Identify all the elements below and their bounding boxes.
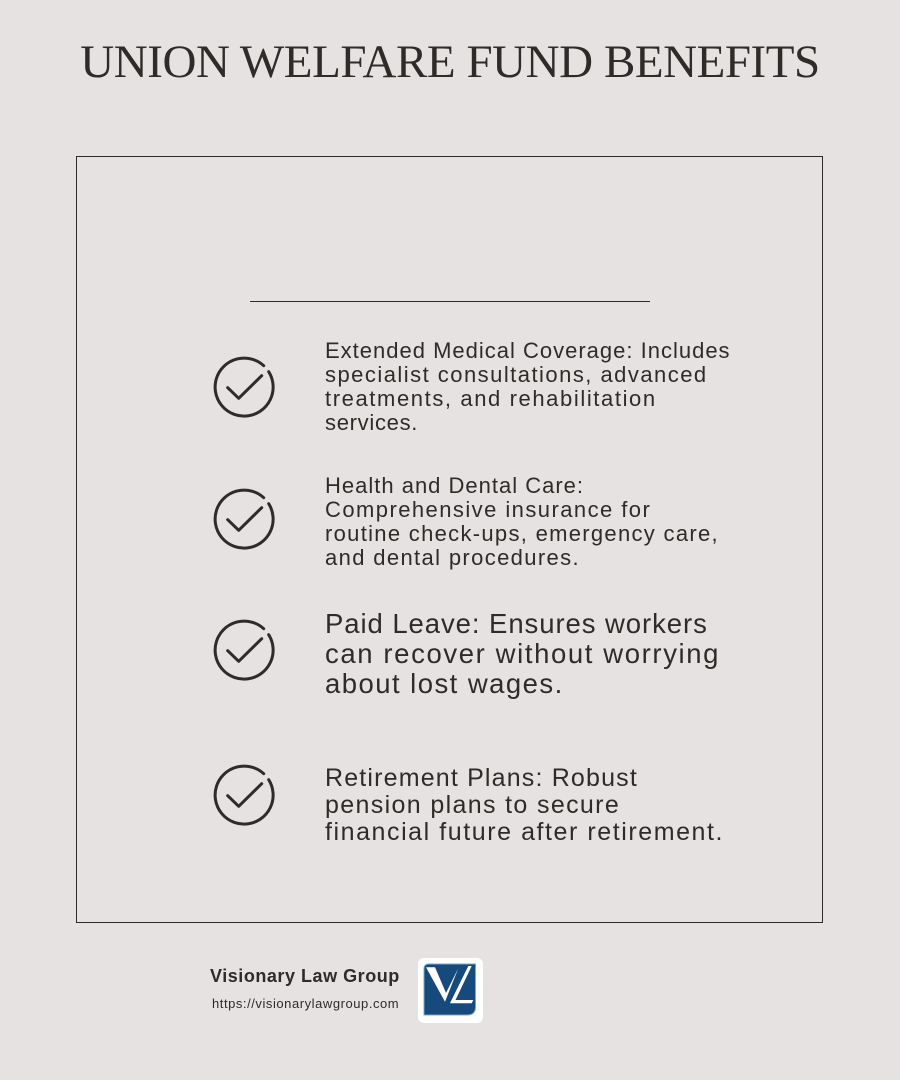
text: health and dental care: and dental procedures. [325,545,580,570]
footer brand name: Visionary Law Group [210,966,400,986]
text: retirement plans [325,764,724,846]
text: retirement plans: Retirement Plans: Robust [325,764,638,792]
text: retirement plans: pension plans to secure [325,791,620,819]
text: extended medical coverage: Extended Medical Coverage: Includes [325,338,731,363]
text: extended medical coverage: specialist consultations, advanced [325,362,708,387]
text: paid leave: about lost wages. [325,668,564,699]
text: health and dental care: Comprehensive insurance for [325,497,651,522]
icon: check circle 4 [214,764,275,826]
title: UNION WELFARE FUND BENEFITS [80,36,820,88]
icon: check circle 3 [214,620,275,681]
footer url: https://visionarylawgroup.com [212,996,399,1011]
text: health and dental care: routine check-ups, emergency care, [325,521,719,546]
text: paid leave: can recover without worrying [325,638,720,669]
icon: VL logo [418,958,483,1023]
text: health and dental care: Health and Dental Care: [325,473,584,498]
text: paid leave: Paid Leave: Ensures workers [325,608,708,639]
text: extended medical coverage [325,338,731,435]
text: extended medical coverage: treatments, and rehabilitation [325,386,657,411]
text: paid leave [325,608,720,699]
panel: benefits frame [76,156,823,923]
icon: check circle 1 [214,356,275,418]
text: health and dental care [325,473,719,570]
icon: check circle 2 [214,488,275,550]
text: retirement plans: financial future after retirement. [325,818,724,846]
text: extended medical coverage: services. [325,410,418,435]
heading rule [250,301,650,302]
